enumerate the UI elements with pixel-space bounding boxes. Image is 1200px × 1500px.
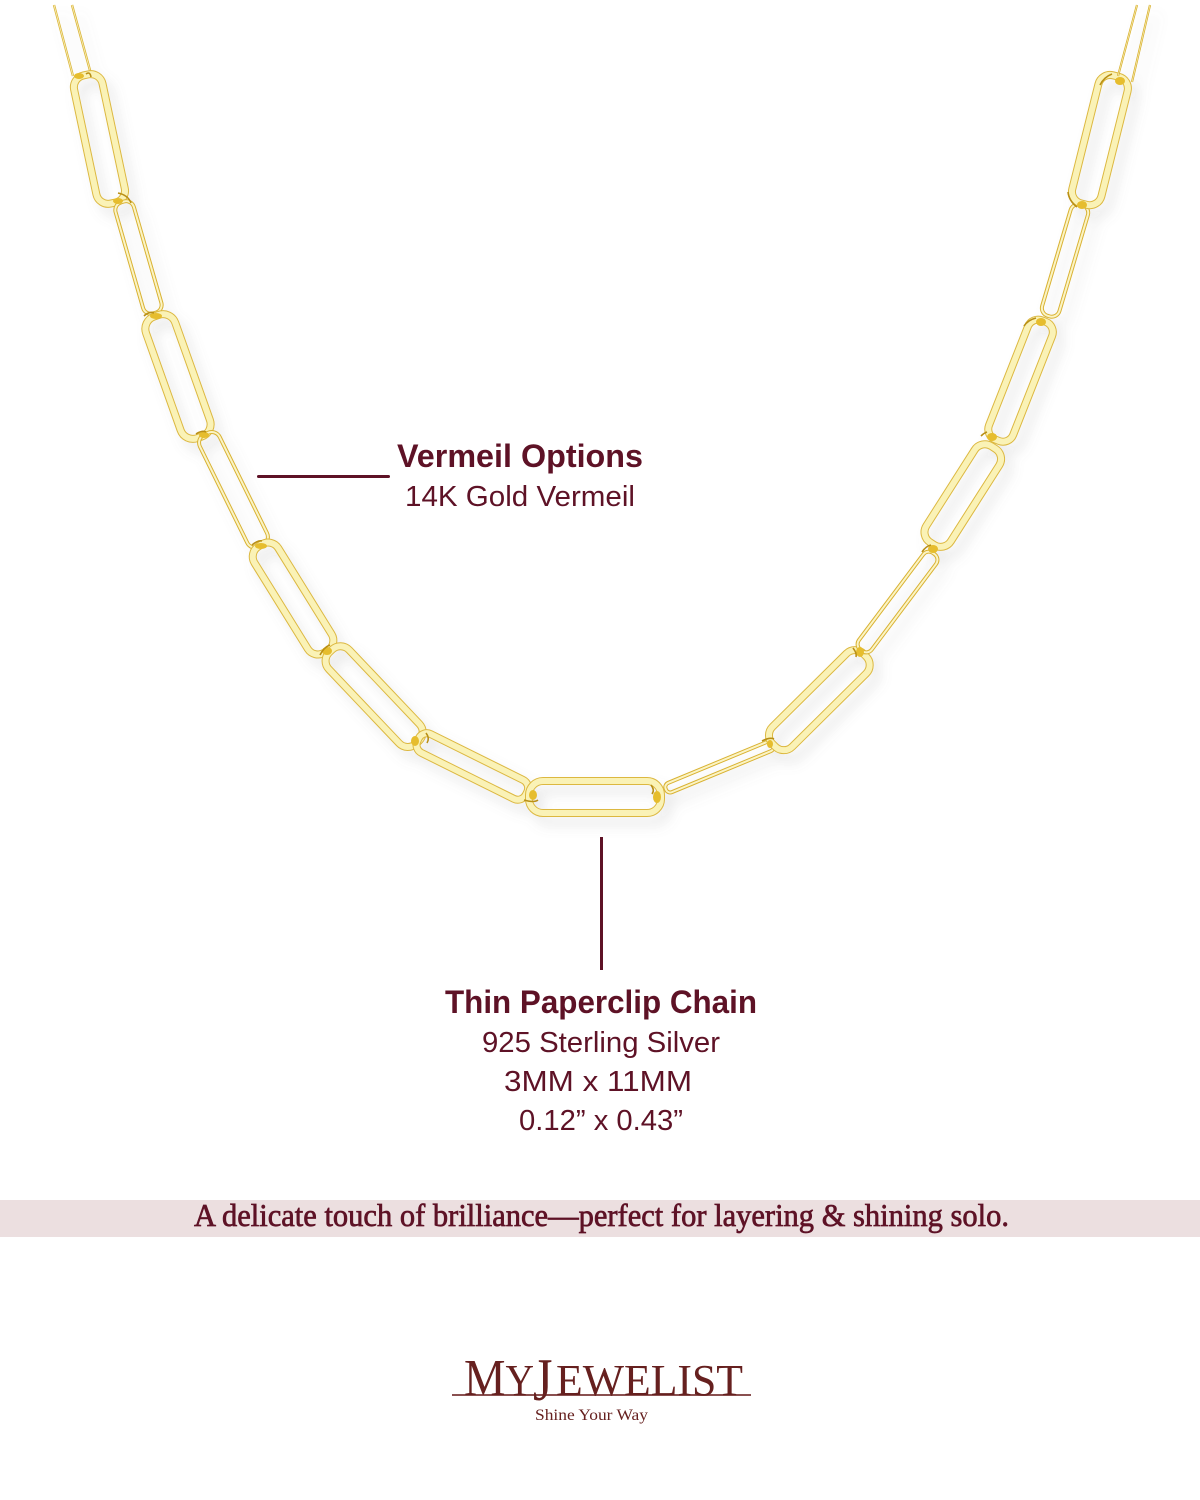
logo letters ewelist: EWELIST [556, 1356, 743, 1405]
link: right 12 [920, 440, 1006, 551]
link: right 9 [664, 740, 775, 794]
text: material: 925 Sterling Silver [482, 1027, 720, 1059]
callout: thin paperclip chain [445, 984, 757, 1137]
logo letters my: MY [464, 1350, 534, 1407]
logo tagline: Shine Your Way [535, 1407, 648, 1424]
link: right 10 [764, 645, 875, 755]
tagline band [0, 1197, 1200, 1237]
link joints [74, 73, 1125, 803]
callout line: vermeil [257, 475, 390, 478]
text: size in inches: 0.12” x 0.43” [519, 1105, 683, 1137]
link: left 6 [321, 641, 428, 752]
heading: vermeil options: Vermeil Options [397, 438, 643, 474]
link: right 15 [1069, 72, 1130, 208]
text: 14k gold vermeil: 14K Gold Vermeil [405, 481, 635, 513]
link: left 1 [72, 72, 127, 206]
link: right 13 [985, 316, 1056, 445]
logo letter j: J [533, 1347, 552, 1413]
heading: thin paperclip chain: Thin Paperclip Chain [445, 984, 757, 1020]
callout: vermeil options [397, 438, 643, 513]
logo: myjewelist [452, 1347, 751, 1424]
link: left 4 [196, 429, 271, 551]
link: center [529, 781, 661, 813]
text: size in millimetres: 3MM x 11MM [504, 1066, 692, 1098]
link: left 3 [142, 311, 214, 442]
link: left 7 [413, 730, 531, 803]
link: left 2 [113, 199, 164, 316]
callout line: chain [600, 837, 603, 970]
link: left 5 [248, 538, 338, 659]
tagline text: A delicate touch of brilliance—perfect for layering & shining solo. [194, 1197, 1009, 1233]
link: top right strand [1118, 5, 1150, 82]
link: top left strand [54, 5, 91, 76]
logo rule [452, 1394, 751, 1396]
necklace chain [54, 5, 1150, 813]
link: right 14 [1040, 202, 1090, 319]
link: right 11 [855, 549, 940, 655]
